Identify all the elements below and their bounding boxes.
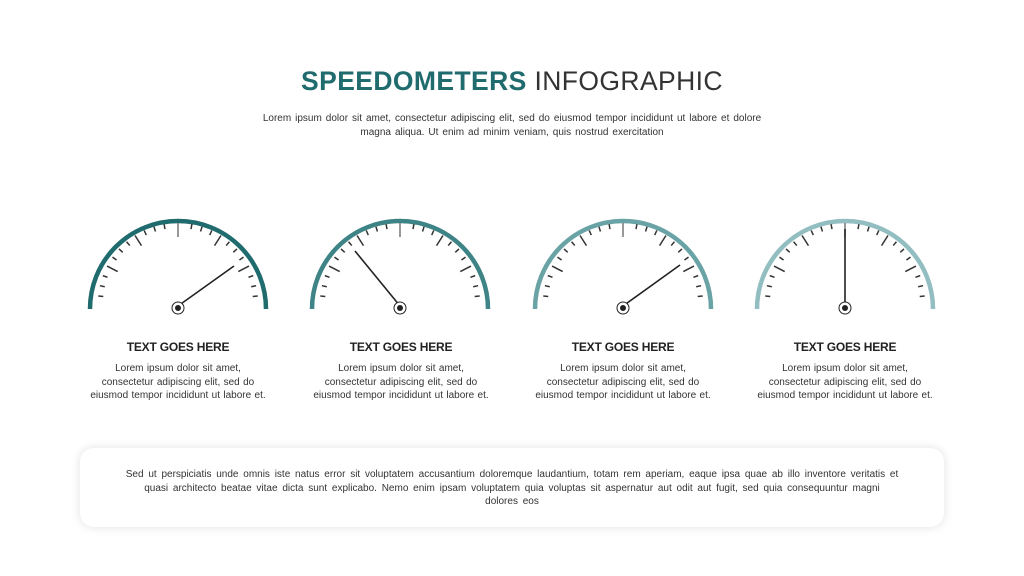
title: SPEEDOMETERS INFOGRAPHIC bbox=[301, 66, 723, 96]
text block 1: eiusmod tempor incididunt ut labore et. bbox=[90, 390, 266, 401]
panel text: Sed ut perspiciatis unde omnis iste natus error sit voluptatem accusantium doloremque laudantium, totam rem aperiam, eaque ipsa quae ab illo inventore veritatis et bbox=[126, 469, 898, 480]
text block 3: eiusmod tempor incididunt ut labore et. bbox=[535, 390, 711, 401]
text block 3: Lorem ipsum dolor sit amet, bbox=[560, 363, 686, 374]
subtitle: Lorem ipsum dolor sit amet, consectetur adipiscing elit, sed do eiusmod tempor incididunt ut labore et dolore bbox=[263, 113, 761, 124]
text block 2: eiusmod tempor incididunt ut labore et. bbox=[313, 390, 489, 401]
text block 3 bbox=[535, 340, 711, 401]
text block 1: consectetur adipiscing elit, sed do bbox=[102, 376, 254, 388]
text block 2: Lorem ipsum dolor sit amet, bbox=[338, 363, 464, 374]
panel text: dolores eos bbox=[485, 496, 539, 507]
text block 4: consectetur adipiscing elit, sed do bbox=[769, 376, 921, 388]
gauge 3 bbox=[535, 221, 711, 314]
text block 2: consectetur adipiscing elit, sed do bbox=[325, 376, 477, 388]
panel text bbox=[126, 469, 898, 507]
subtitle: magna aliqua. Ut enim ad minim veniam, quis nostrud exercitation bbox=[360, 126, 664, 138]
text block 3: consectetur adipiscing elit, sed do bbox=[547, 376, 699, 388]
gauge 4 bbox=[757, 221, 933, 314]
text block 2: TEXT GOES HERE bbox=[350, 340, 452, 354]
bottom panel bbox=[80, 448, 944, 527]
text block 4: Lorem ipsum dolor sit amet, bbox=[782, 363, 908, 374]
text block 4: TEXT GOES HERE bbox=[794, 340, 896, 354]
subtitle bbox=[263, 113, 761, 138]
panel text: quasi architecto beatae vitae dicta sunt explicabo. Nemo enim ipsam voluptatem quia voluptas sit aspernatur aut odit aut fugit, sed quia consequuntur magni bbox=[144, 482, 880, 494]
text block 3: TEXT GOES HERE bbox=[572, 340, 674, 354]
text block 1: Lorem ipsum dolor sit amet, bbox=[115, 363, 241, 374]
gauge 1 bbox=[90, 221, 266, 314]
gauge 2 bbox=[312, 221, 488, 314]
text block 1: TEXT GOES HERE bbox=[127, 340, 229, 354]
text block 1 bbox=[90, 340, 266, 401]
text block 4 bbox=[757, 340, 933, 401]
text block 2 bbox=[313, 340, 489, 401]
text block 4: eiusmod tempor incididunt ut labore et. bbox=[757, 390, 933, 401]
